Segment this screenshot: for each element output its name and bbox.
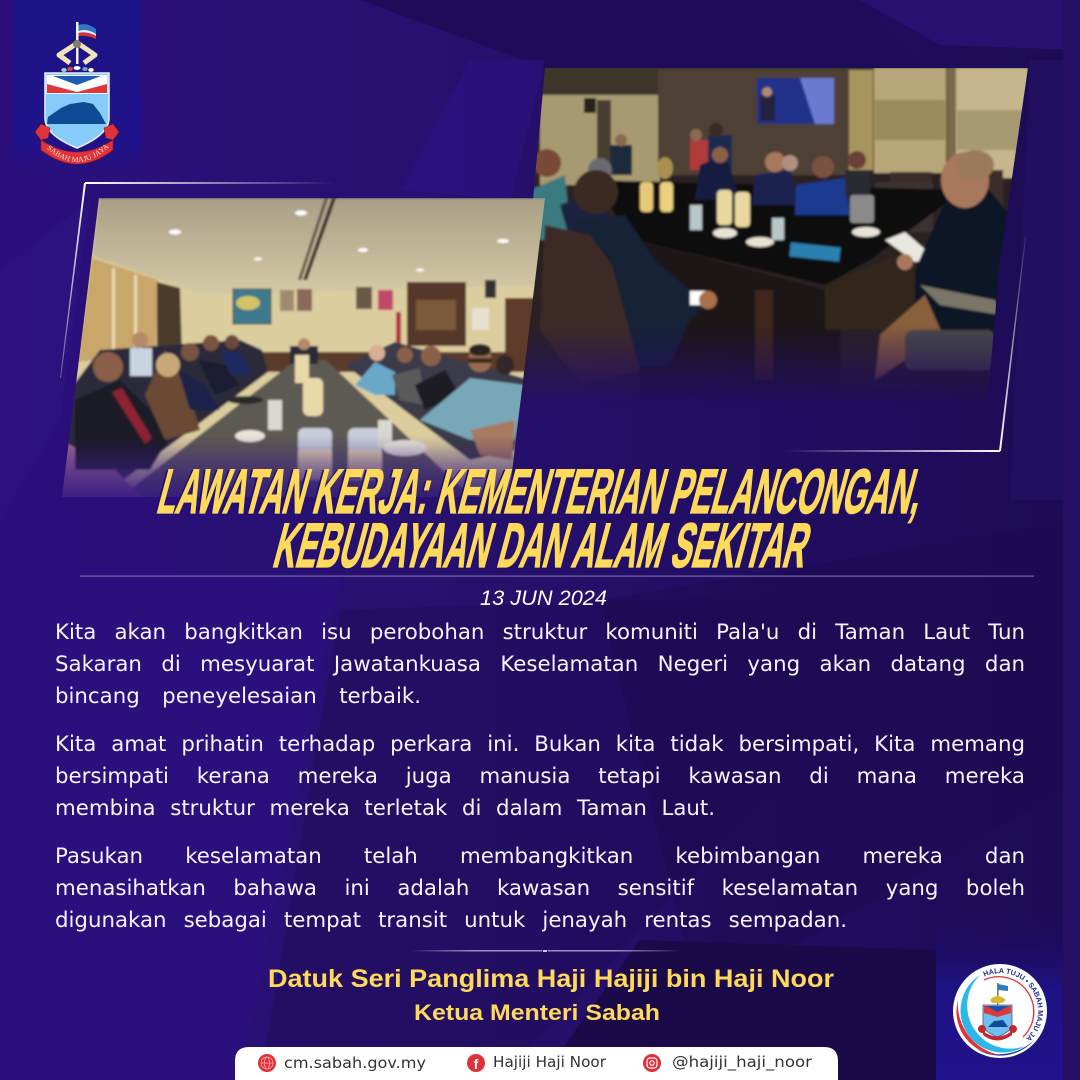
paragraph 1: Kita akan bangkitkan isu perobohan struktur komuniti Pala'u di Taman Laut Tun bbox=[55, 620, 1025, 645]
paragraph 3 bbox=[55, 844, 1025, 933]
title bbox=[151, 456, 932, 581]
icon: facebook: f bbox=[474, 1056, 479, 1072]
icon: facebook bbox=[467, 1054, 485, 1072]
photo: meeting table with speaker bbox=[522, 68, 1028, 398]
paragraph 1: Sakaran di mesyuarat Jawatankuasa Keselamatan Negeri yang akan datang dan bbox=[55, 652, 1025, 677]
paragraph 2 bbox=[55, 732, 1025, 821]
logo: Sabah coat of arms: SABAH MAJU JAYA bbox=[47, 144, 109, 162]
white frame: right photo bbox=[785, 237, 1026, 452]
paragraph 2: membina struktur mereka terletak di dalam Taman Laut. bbox=[55, 796, 715, 821]
facebook text: Hajiji Haji Noor bbox=[493, 1053, 607, 1071]
title divider bbox=[80, 576, 1034, 577]
paragraph 2: Kita amat prihatin terhadap perkara ini. Bukan kita tidak bersimpati, Kita memang bbox=[55, 732, 1025, 757]
footer contact bar bbox=[235, 1047, 838, 1080]
icon: instagram bbox=[643, 1054, 661, 1072]
website text: cm.sabah.gov.my bbox=[284, 1054, 426, 1072]
photo: meeting room seen from table end bbox=[55, 198, 550, 508]
paragraph 1: bincang peneyelesaian terbaik. bbox=[55, 684, 421, 709]
paragraph 3: digunakan sebagai tempat transit untuk jenayah rentas sempadan. bbox=[55, 908, 847, 933]
signatory role: Ketua Menteri Sabah bbox=[414, 1000, 660, 1025]
icon: website globe bbox=[258, 1054, 276, 1072]
instagram text: @hajiji_haji_noor bbox=[672, 1053, 813, 1072]
logo: Sabah coat of arms bbox=[34, 22, 120, 164]
paragraph 3: menasihatkan bahawa ini adalah kawasan sensitif keselamatan yang boleh bbox=[55, 876, 1025, 901]
paragraph 1 bbox=[55, 620, 1025, 709]
signatory name: Datuk Seri Panglima Haji Hajiji bin Haji Noor bbox=[268, 965, 834, 993]
signature divider bbox=[410, 950, 680, 952]
white frame: left photo bbox=[60, 182, 335, 378]
date: 13 JUN 2024 bbox=[480, 586, 607, 610]
paragraph 2: bersimpati kerana mereka juga manusia tetapi kawasan di mana mereka bbox=[55, 764, 1025, 789]
logo: Hala Tuju Sabah Maju Jaya badge: HALA TUJU • SABAH MAJU JAYA bbox=[983, 968, 1043, 1040]
paragraph 3: Pasukan keselamatan telah membangkitkan kebimbangan mereka dan bbox=[55, 844, 1025, 869]
